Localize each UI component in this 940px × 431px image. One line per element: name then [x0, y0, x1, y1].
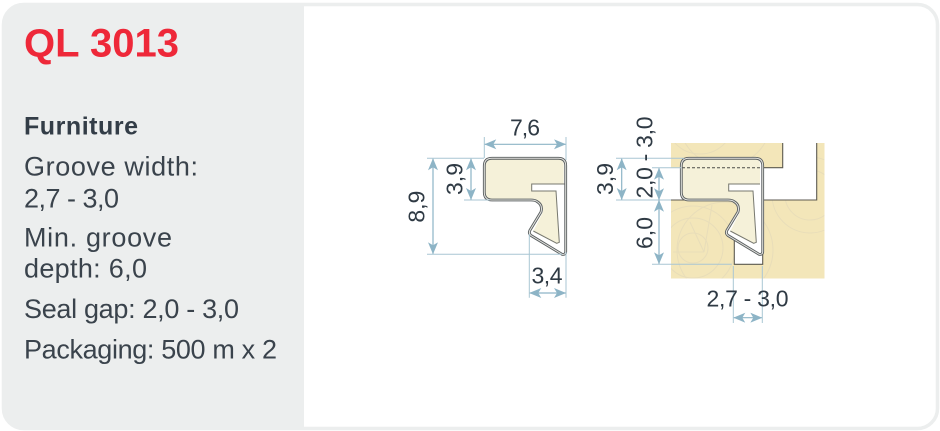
- seal in groove: [681, 158, 763, 254]
- text: min groove depth: [24, 223, 172, 283]
- text: groove width: [24, 151, 198, 213]
- dimension: width 7,6: 7,6: [510, 115, 540, 141]
- wood blocks: [671, 143, 824, 278]
- dimension: groove depth 6,0: [631, 200, 732, 264]
- dimension: groove width 2,7 - 3,0: 2,7 - 3,0: [706, 286, 788, 312]
- text: packaging: Packaging: 500 m x 2: [24, 334, 277, 364]
- text: groove width: 2,7 - 3,0: [24, 183, 119, 213]
- text: seal gap: Seal gap: 2,0 - 3,0: [24, 294, 239, 324]
- dimension: height 3,9: 3,9: [441, 163, 467, 195]
- dimension: seal gap 2,0 - 3,0: 2,0 - 3,0: [631, 116, 657, 198]
- dimension: width 7,6: [484, 115, 566, 160]
- dimension: seal gap 2,0 - 3,0: [631, 116, 681, 200]
- diagram: seal profile dimensions: [403, 115, 566, 298]
- text: min groove depth: Min. groove: [24, 223, 172, 253]
- seal profile: [484, 158, 566, 254]
- dimension: width 3,4: 3,4: [532, 262, 563, 288]
- dimension: height 3,9: [441, 159, 490, 200]
- dimension: height 3,9: [592, 158, 684, 200]
- text: groove width: Groove width:: [24, 151, 198, 181]
- dimension: groove width 2,7 - 3,0: [706, 266, 788, 323]
- dimension: height 3,9: 3,9: [592, 163, 618, 195]
- dimension: width 3,4: [529, 234, 566, 298]
- panel: left info sidebar: [2, 3, 304, 430]
- text: min groove depth: depth: 6,0: [24, 253, 147, 283]
- diagram: installed seal in groove: [597, 117, 824, 323]
- dimension: height 8,9: [403, 158, 562, 254]
- dimension: height 8,9: 8,9: [403, 191, 429, 223]
- heading: furniture: Furniture: [24, 112, 138, 140]
- title: QL 3013: [24, 22, 179, 66]
- dimension: groove depth 6,0: 6,0: [631, 217, 657, 249]
